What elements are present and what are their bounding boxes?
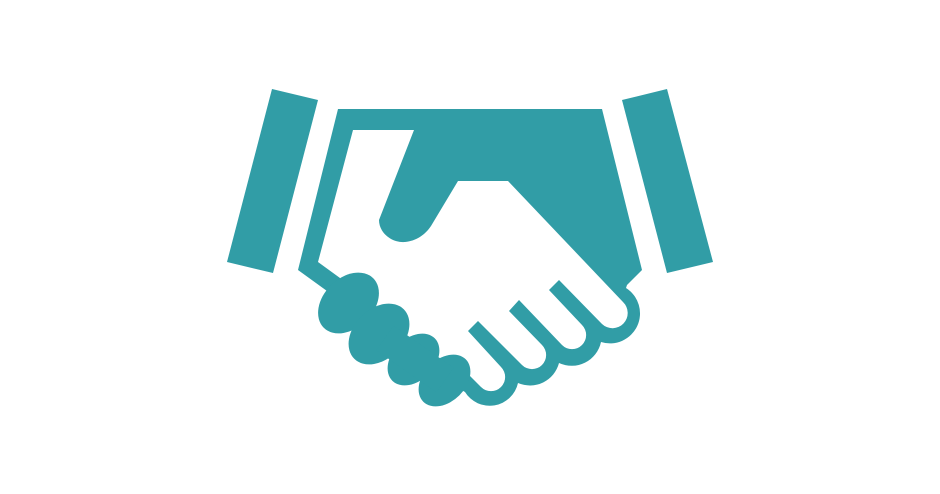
icon: knuckles <box>306 261 481 417</box>
icon: knuckle 3 <box>377 323 450 396</box>
icon: knuckle 2 <box>337 292 421 376</box>
icon: knuckle 1 <box>306 261 391 345</box>
icon: right cuff <box>622 89 713 273</box>
icon: left cuff <box>227 89 318 273</box>
icon: knuckle connector <box>385 338 445 380</box>
icon: clasped hands outline <box>298 109 642 406</box>
icon: knuckle 4 <box>408 344 481 417</box>
icon: white hand and fingers <box>318 130 628 391</box>
